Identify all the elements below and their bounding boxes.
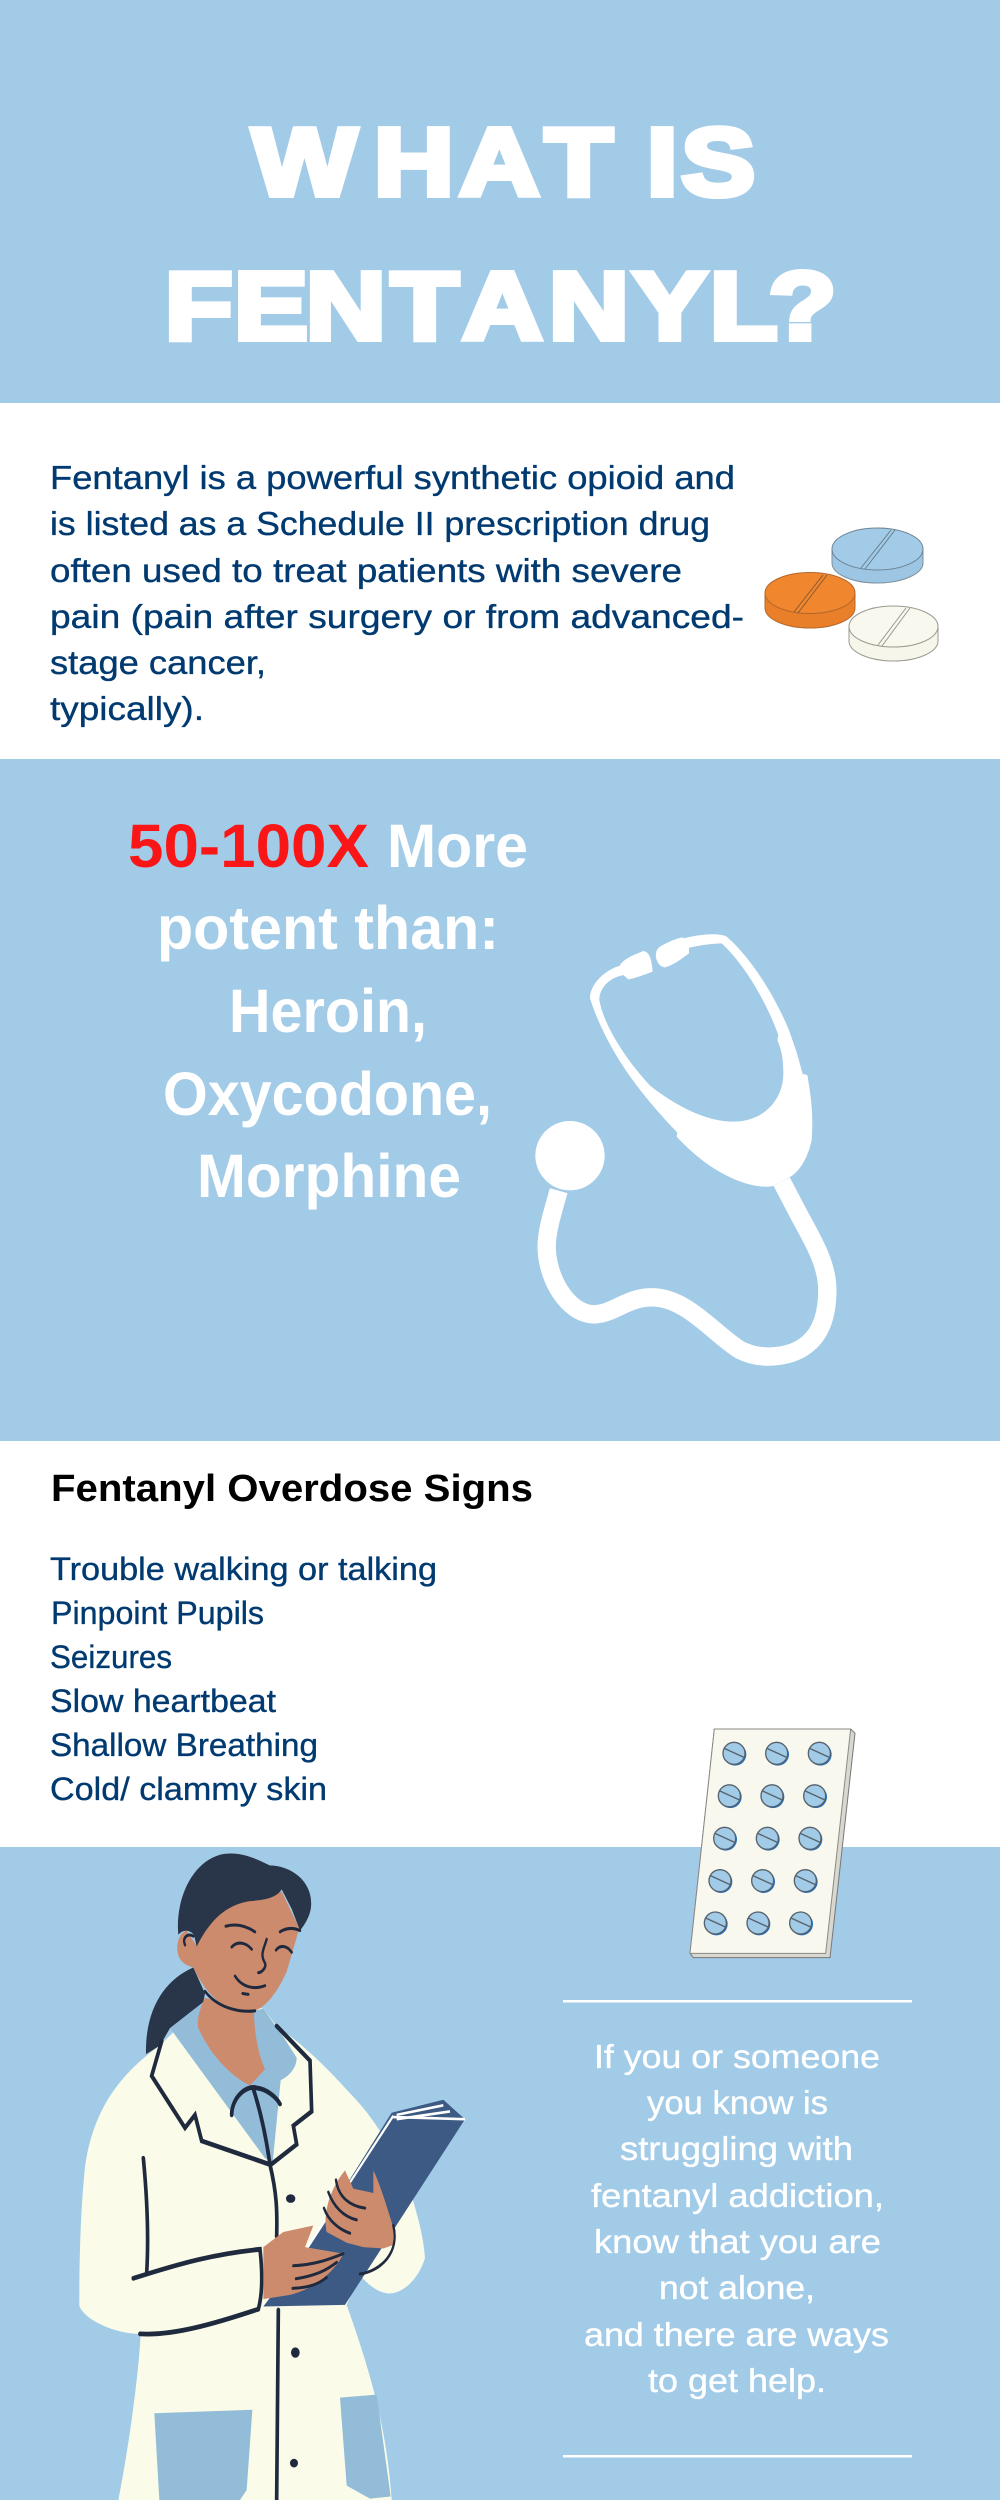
callout text: to get help. [648, 2362, 826, 2399]
callout text: and there are ways [584, 2316, 889, 2353]
callout: help message [563, 2000, 912, 2458]
heading: potency comparison [128, 812, 528, 1210]
panel: definition white band [0, 403, 1000, 759]
callout text: know that you are [594, 2223, 881, 2260]
icon: stethoscope [535, 934, 827, 1357]
ponytail [146, 1967, 205, 2054]
heading: potency comparison: potent than: [157, 894, 499, 962]
callout top rule [563, 2000, 912, 2002]
list: overdose signs: Cold/ clammy skin [50, 1771, 327, 1807]
callout text [584, 2038, 889, 2399]
callout bottom rule [563, 2455, 912, 2458]
text block: fentanyl definition [50, 459, 744, 727]
pockets [154, 2395, 391, 2500]
book pages [305, 2105, 465, 2251]
heading: overdose signs: Fentanyl Overdose Signs [51, 1468, 533, 1510]
icon: three pills [765, 528, 938, 661]
finger and sleeve lines [293, 2180, 395, 2288]
neck [198, 1998, 265, 2085]
face details [184, 1925, 300, 2011]
book [263, 2100, 465, 2307]
lab coat [79, 2002, 425, 2500]
hands [263, 2170, 393, 2299]
list: overdose signs: Trouble walking or talking [50, 1551, 437, 1587]
callout text: fentanyl addiction, [591, 2177, 884, 2214]
title [165, 108, 836, 359]
icon: blue pill [832, 528, 923, 583]
text block: fentanyl definition: Fentanyl is a powerful synthetic opioid and [50, 459, 735, 496]
title: WHAT IS [252, 108, 755, 215]
coat lines [133, 2026, 312, 2500]
callout text: you know is [647, 2084, 828, 2121]
shirt collar [170, 2002, 297, 2163]
list: overdose signs: Seizures [50, 1639, 172, 1675]
heading: potency comparison: 50-100X [128, 812, 369, 880]
list: overdose signs: Pinpoint Pupils [51, 1595, 264, 1631]
panel: overdose signs white band [0, 1441, 1000, 1847]
callout text: not alone, [659, 2269, 815, 2306]
face [177, 1892, 299, 2012]
callout text: If you or someone [594, 2038, 880, 2075]
icon: orange pill [765, 572, 855, 628]
list: overdose signs: Slow heartbeat [50, 1683, 276, 1719]
pills rows [704, 1742, 832, 1935]
text block: fentanyl definition: often used to treat patients with severe [50, 552, 682, 589]
icon: blister pack [690, 1729, 855, 1958]
illustration: doctor holding book [79, 1854, 465, 2500]
icon: white pill [849, 606, 938, 661]
text block: fentanyl definition: is listed as a Schedule II prescription drug [50, 505, 710, 542]
heading: potency comparison: Oxycodone, [163, 1060, 492, 1128]
text block: fentanyl definition: stage cancer, [50, 644, 266, 681]
list: overdose signs: Shallow Breathing [50, 1727, 318, 1763]
heading: potency comparison: More [387, 812, 528, 880]
text block: fentanyl definition: pain (pain after surgery or from advanced- [50, 598, 744, 635]
callout text: struggling with [620, 2130, 853, 2167]
coat buttons [286, 2194, 300, 2467]
list: overdose signs [50, 1551, 437, 1807]
hair [178, 1854, 311, 1947]
heading: potency comparison: Heroin, [229, 977, 427, 1045]
text block: fentanyl definition: typically). [50, 690, 204, 727]
heading: potency comparison: Morphine [197, 1142, 461, 1210]
title: FENTANYL? [165, 252, 836, 359]
